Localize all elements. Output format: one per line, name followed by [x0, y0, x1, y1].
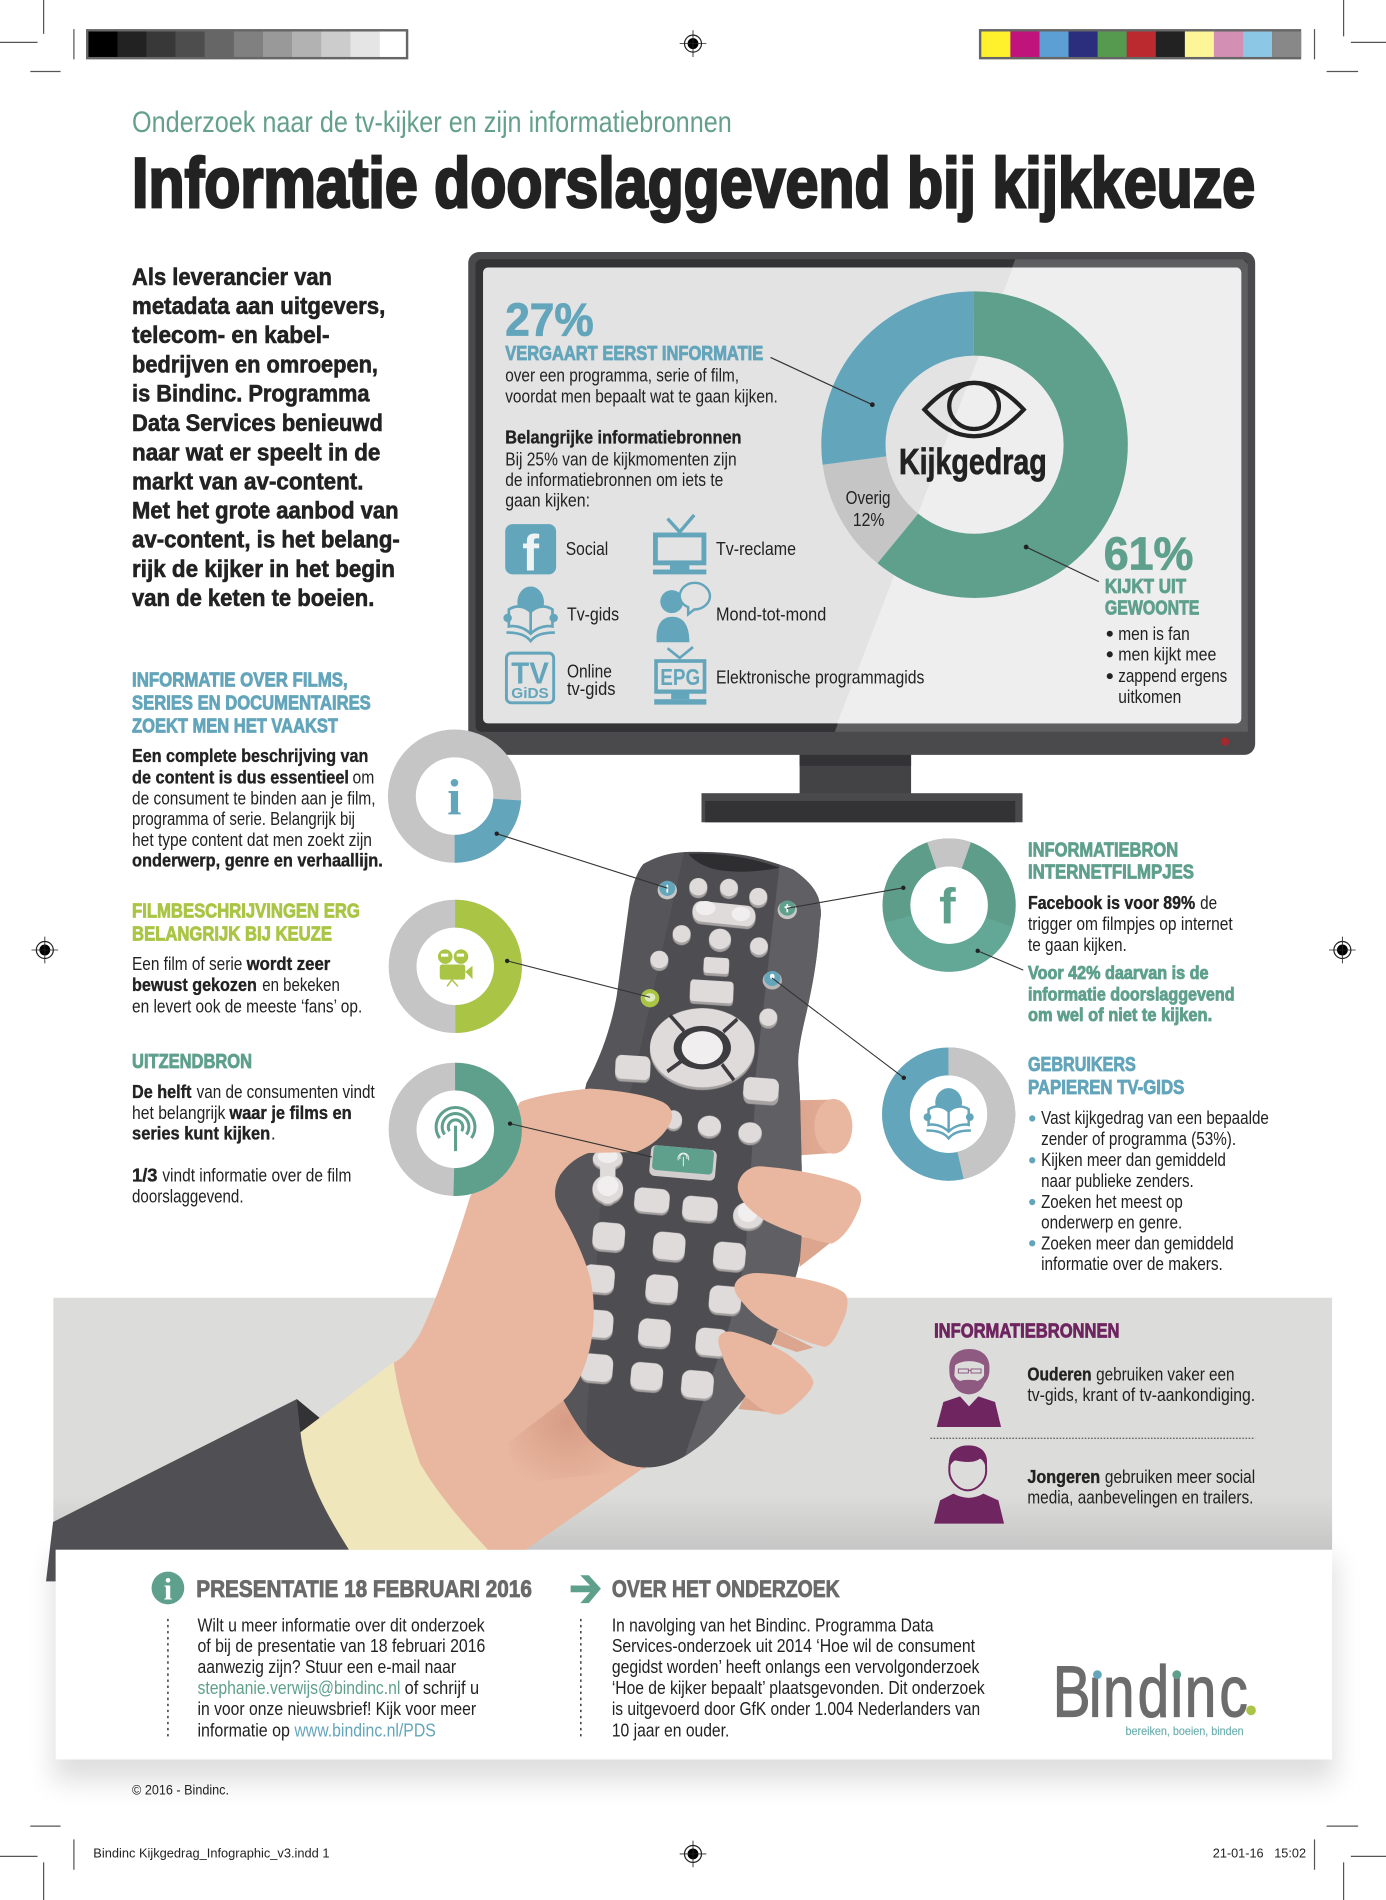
tv power led: [1221, 737, 1229, 746]
section: informatie over films: de content is dus essentieel: [132, 767, 349, 787]
text: ouderen: [1027, 1365, 1255, 1405]
intro text block: [132, 265, 400, 612]
tv housing: [468, 252, 1255, 755]
intro text block: bedrijven en omroepen,: [132, 353, 378, 379]
label: overig 12%: [846, 488, 890, 530]
green broadcast button: [649, 1145, 717, 1181]
section: presentatie: [152, 1572, 532, 1740]
section: over het onderzoek: Services-onderzoek uit 2014 ‘Hoe wil de consument: [612, 1636, 975, 1656]
section: informatie over films: SERIES EN DOCUMENTAIRES: [132, 691, 371, 714]
intro text block: naar wat er speelt in de: [132, 440, 380, 466]
stat: 27%: 27%: [505, 294, 594, 346]
section: papieren tv-gids: [1028, 1053, 1269, 1274]
stat: 61%: GEWOONTE: [1105, 596, 1199, 619]
intro text block: telecom- en kabel-: [132, 323, 330, 349]
section: papieren tv-gids: zender of programma (53%).: [1041, 1129, 1236, 1149]
section: uitzendbron: UITZENDBRON: [132, 1050, 252, 1073]
section: filmbeschrijvingen: FILMBESCHRIJVINGEN ERG: [132, 899, 360, 922]
lower buttons: [580, 1076, 779, 1399]
label: mond-tot-mond: Mond-tot-mond: [716, 604, 826, 624]
icon: young man: [934, 1445, 1004, 1524]
text: ouderen: gebruiken vaker een: [1096, 1365, 1235, 1385]
section: papieren tv-gids: Zoeken meer dan gemiddeld: [1041, 1233, 1234, 1253]
stat: 27%: VERGAART EERST INFORMATIE: [505, 342, 763, 365]
intro text block: markt van av-content.: [132, 470, 363, 496]
icon: eye: [924, 383, 1024, 436]
icon: reader: [924, 1088, 974, 1138]
text: jongeren: [1027, 1467, 1255, 1508]
donut: film 50%: [403, 914, 508, 1019]
infrared window: [688, 854, 780, 872]
section: filmbeschrijvingen: [132, 899, 362, 1016]
section: internetfilmpjes: trigger om filmpjes op internet: [1028, 914, 1233, 934]
donut: facebook: [882, 838, 1016, 972]
section: filmbeschrijvingen: Een film of serie: [132, 954, 242, 974]
stat: 61%: [1104, 528, 1227, 707]
donut chart: kijkgedrag: [853, 324, 1096, 566]
section: internetfilmpjes: informatie doorslaggevend: [1028, 984, 1235, 1004]
section: uitzendbron: waar je films en: [228, 1103, 352, 1123]
section: internetfilmpjes: de: [1200, 893, 1217, 913]
text: belangrijke informatiebronnen: [505, 427, 741, 511]
tv stand: [701, 751, 1023, 822]
section: internetfilmpjes: Voor 42% daarvan is de: [1028, 963, 1209, 983]
icon: film camera: [438, 949, 472, 986]
logo: bindinc: bereiken, boeien, binden: [1126, 1726, 1244, 1738]
stat: 27%: over een programma, serie of film,: [505, 366, 739, 386]
intro text block: av-content, is het belang-: [132, 528, 400, 554]
icon: reader tv-gids: [503, 586, 558, 641]
stat: 61%: 61%: [1104, 528, 1193, 580]
section: uitzendbron: vindt informatie over de film: [162, 1165, 351, 1185]
illustration: sleeve: [46, 1399, 349, 1581]
section: informatie over films: de consument te binden aan je film,: [132, 789, 376, 809]
registration mark top: [680, 30, 706, 57]
section: presentatie: www.bindinc.nl/PDS: [294, 1720, 436, 1740]
section: internetfilmpjes: INFORMATIEBRON: [1028, 839, 1178, 862]
remote colour bands: [586, 852, 821, 1468]
text: ouderen: Ouderen: [1027, 1365, 1092, 1385]
label: tv-reclame: Tv-reclame: [716, 539, 796, 559]
logo: bindinc: Bindinc: [1053, 1651, 1248, 1732]
section: over het onderzoek: is uitgevoerd door GfK onder 1.004 Nederlanders van: [612, 1699, 980, 1719]
label: overig 12%: 12%: [853, 510, 884, 530]
section: presentatie: informatie op: [197, 1720, 290, 1740]
finger one: [738, 1166, 861, 1244]
illustration: thumb and fingers: [437, 1089, 861, 1444]
section: informatie over films: het type content dat men zoekt zijn: [132, 830, 372, 850]
finger two: [734, 1273, 848, 1347]
illustration: shirt cuff: [300, 1362, 515, 1550]
section: filmbeschrijvingen: en bekeken: [262, 975, 340, 995]
icon: older man: [937, 1349, 1001, 1427]
panel: television: [468, 252, 1255, 822]
section: over het onderzoek: ‘Hoe de kijker bepaalt’ plaatsgevonden. Dit onderzoek: [612, 1678, 986, 1698]
remote body: [533, 852, 821, 1467]
section: internetfilmpjes: om wel of niet te kijken.: [1028, 1005, 1212, 1025]
section: uitzendbron: doorslaggevend.: [132, 1187, 244, 1207]
panel: footer card: [56, 1550, 1332, 1759]
section: informatie over films: programma of serie. Belangrijk bij: [132, 809, 355, 829]
back finger: [797, 1099, 852, 1155]
finger three: [718, 1332, 813, 1415]
label: online tv-gids: Online: [567, 661, 612, 681]
tv screen: [483, 268, 1241, 723]
section: over het onderzoek: In navolging van het Bindinc. Programma Data: [612, 1615, 934, 1635]
section: uitzendbron: 1/3: [132, 1165, 158, 1185]
stat: 61%: men is fan: [1118, 624, 1190, 644]
icon: word of mouth: [657, 583, 710, 642]
section: uitzendbron: De helft: [132, 1082, 191, 1102]
thumb and palm: [437, 1089, 672, 1444]
donut: paper tv guide: [896, 1061, 1001, 1167]
colour calibration strip: [979, 29, 1301, 59]
finger shades: [738, 1236, 830, 1412]
coloured buttons: [641, 881, 797, 1007]
text: jongeren: gebruiken meer social: [1105, 1467, 1255, 1487]
section: informatie over films: om: [353, 767, 374, 787]
section: uitzendbron: [132, 1050, 375, 1207]
text: ouderen: tv-gids, krant of tv-aankondiging.: [1027, 1385, 1255, 1405]
section: papieren tv-gids: naar publieke zenders.: [1041, 1171, 1194, 1191]
registration mark right: [1329, 937, 1356, 963]
upper buttons: [615, 878, 779, 1103]
print slug right: 21-01-16 15:02: [1213, 1846, 1306, 1861]
label: overig 12%: Overig: [846, 488, 890, 508]
section: informatie over films: onderwerp, genre en verhaallijn.: [132, 850, 383, 870]
section: informatie over films: INFORMATIE OVER FILMS,: [132, 668, 348, 691]
section: filmbeschrijvingen: en levert ook de meeste ‘fans’ op.: [132, 996, 362, 1016]
donut: broadcast 50%: [403, 1077, 508, 1182]
section: informatie over films: ZOEKT MEN HET VAAKST: [132, 714, 338, 737]
copyright: © 2016 - Bindinc.: [132, 1781, 229, 1797]
section: presentatie: aanwezig zijn? Stuur een e-mail naar: [197, 1657, 456, 1677]
section: papieren tv-gids: PAPIEREN TV-GIDS: [1028, 1076, 1184, 1099]
text: belangrijke informatiebronnen: Bij 25% van de kijkmomenten zijn: [505, 449, 737, 469]
section: informatie over films: [132, 668, 383, 870]
section: internetfilmpjes: [1028, 839, 1235, 1025]
stat: 61%: KIJKT UIT: [1105, 575, 1186, 598]
icon: info circle: [152, 1572, 184, 1606]
intro text block: Data Services benieuwd: [132, 411, 383, 437]
illustration: hand back: [394, 1099, 852, 1554]
intro text block: Als leverancier van: [132, 265, 332, 291]
section: informatiebronnen: INFORMATIEBRONNEN: [934, 1320, 1119, 1343]
icon: epg: [654, 647, 706, 705]
stat: 27%: [505, 294, 778, 406]
section: over het onderzoek: 10 jaar en ouder.: [612, 1720, 729, 1740]
stat: 61%: zappend ergens: [1118, 666, 1227, 686]
label: tv-gids: Tv-gids: [567, 604, 619, 624]
section: informatie over films: Een complete beschrijving van: [132, 746, 368, 766]
section: papieren tv-gids: Kijken meer dan gemiddeld: [1041, 1150, 1226, 1170]
lower remote details: [580, 1076, 779, 1399]
callout lines from buttons to donuts: [495, 831, 1023, 1157]
label: online tv-gids: [567, 661, 615, 699]
section: filmbeschrijvingen: wordt zeer: [246, 954, 330, 974]
icon: tv: [653, 515, 706, 574]
icon: arrow: [571, 1575, 601, 1603]
intro text block: metadata aan uitgevers,: [132, 294, 385, 320]
section: uitzendbron: .: [271, 1124, 276, 1144]
stat: 61%: men kijkt mee: [1118, 644, 1216, 664]
donut: information 25%: [402, 743, 507, 849]
section: over het onderzoek: OVER HET ONDERZOEK: [612, 1576, 840, 1603]
icon: tv gids logo: GiDS: [511, 686, 549, 702]
icon: facebook: [505, 524, 556, 582]
upper remote details: [615, 854, 797, 1103]
pill highlights: [597, 1150, 758, 1222]
section: papieren tv-gids: Zoeken het meest op: [1041, 1192, 1183, 1212]
section: presentatie: stephanie.verwijs@bindinc.nl: [197, 1678, 400, 1698]
stat: 61%: uitkomen: [1118, 687, 1181, 707]
section: papieren tv-gids: GEBRUIKERS: [1028, 1053, 1136, 1076]
d-pad details: [667, 901, 750, 1080]
intro text block: is Bindinc. Programma: [132, 382, 370, 408]
leader line 27%: [771, 357, 875, 407]
intro text block: van de keten te boeien.: [132, 586, 374, 612]
section: filmbeschrijvingen: BELANGRIJK BIJ KEUZE: [132, 922, 332, 945]
section: papieren tv-gids: Vast kijkgedrag van een bepaalde: [1041, 1108, 1269, 1128]
section: presentatie: of schrijf u: [405, 1678, 479, 1698]
text: belangrijke informatiebronnen: Belangrijke informatiebronnen: [505, 427, 741, 447]
grayscale calibration strip: [86, 29, 408, 59]
registration mark left: [32, 937, 58, 963]
icon: antenna: [436, 1108, 475, 1151]
section: internetfilmpjes: INTERNETFILMPJES: [1028, 861, 1194, 884]
icon: tv gids logo: [506, 653, 554, 703]
icon: info circle: i: [164, 1572, 172, 1606]
donut centre label: Kijkgedrag: [899, 441, 1047, 482]
icon: facebook: f: [522, 525, 540, 582]
section: informatiebronnen: [930, 1320, 1255, 1524]
section: over het onderzoek: gegidst worden’ heeft onlangs een vervolgonderzoek: [612, 1657, 980, 1677]
text: jongeren: media, aanbevelingen en trailers.: [1027, 1488, 1253, 1508]
section: presentatie: of bij de presentatie van 18 februari 2016: [197, 1636, 485, 1656]
label: social: Social: [566, 539, 608, 559]
label: online tv-gids: tv-gids: [567, 679, 615, 699]
section: presentatie: Wilt u meer informatie over dit onderzoek: [197, 1615, 485, 1635]
icon: epg: EPG: [660, 664, 700, 690]
donut: information 25%: i: [447, 770, 461, 826]
panel shadow: [53, 1557, 1335, 1781]
icon: tv gids logo: TV: [511, 657, 549, 690]
section: papieren tv-gids: onderwerp en genre.: [1041, 1212, 1182, 1232]
intro text block: rijk de kijker in het begin: [132, 557, 395, 583]
gray background band: [53, 1298, 1332, 1550]
donut: facebook: f: [939, 878, 956, 934]
leader line 61%: [1024, 545, 1099, 582]
text: belangrijke informatiebronnen: gaan kijken:: [505, 491, 590, 511]
subtitle: Onderzoek naar de tv-kijker en zijn informatiebronnen: [132, 106, 732, 139]
section: uitzendbron: het belangrijk: [132, 1103, 226, 1123]
section: internetfilmpjes: Facebook is voor 89%: [1028, 893, 1195, 913]
palm shadow: [507, 1400, 647, 1484]
print slug left: Bindinc Kijkgedrag_Infographic_v3.indd 1: [93, 1846, 330, 1861]
registration mark bottom: [680, 1841, 706, 1867]
section: presentatie: in voor onze nieuwsbrief! Kijk voor meer: [197, 1699, 476, 1719]
section: papieren tv-gids: informatie over de makers.: [1041, 1254, 1223, 1274]
label: elektronische programmagids: Elektronische programmagids: [716, 667, 924, 687]
section: internetfilmpjes: te gaan kijken.: [1028, 935, 1127, 955]
section: presentatie: PRESENTATIE 18 FEBRUARI 2016: [196, 1576, 532, 1603]
intro text block: Met het grote aanbod van: [132, 499, 399, 525]
section: uitzendbron: van de consumenten vindt: [197, 1082, 375, 1102]
section: uitzendbron: series kunt kijken: [132, 1124, 270, 1144]
text: belangrijke informatiebronnen: de informatiebronnen om iets te: [505, 470, 723, 490]
section: filmbeschrijvingen: bewust gekozen: [132, 975, 257, 995]
stat: 27%: voordat men bepaalt wat te gaan kijken.: [505, 386, 778, 406]
section: over het onderzoek: [571, 1575, 986, 1740]
illustration: remote control: [533, 848, 848, 1478]
text: jongeren: Jongeren: [1027, 1467, 1100, 1487]
